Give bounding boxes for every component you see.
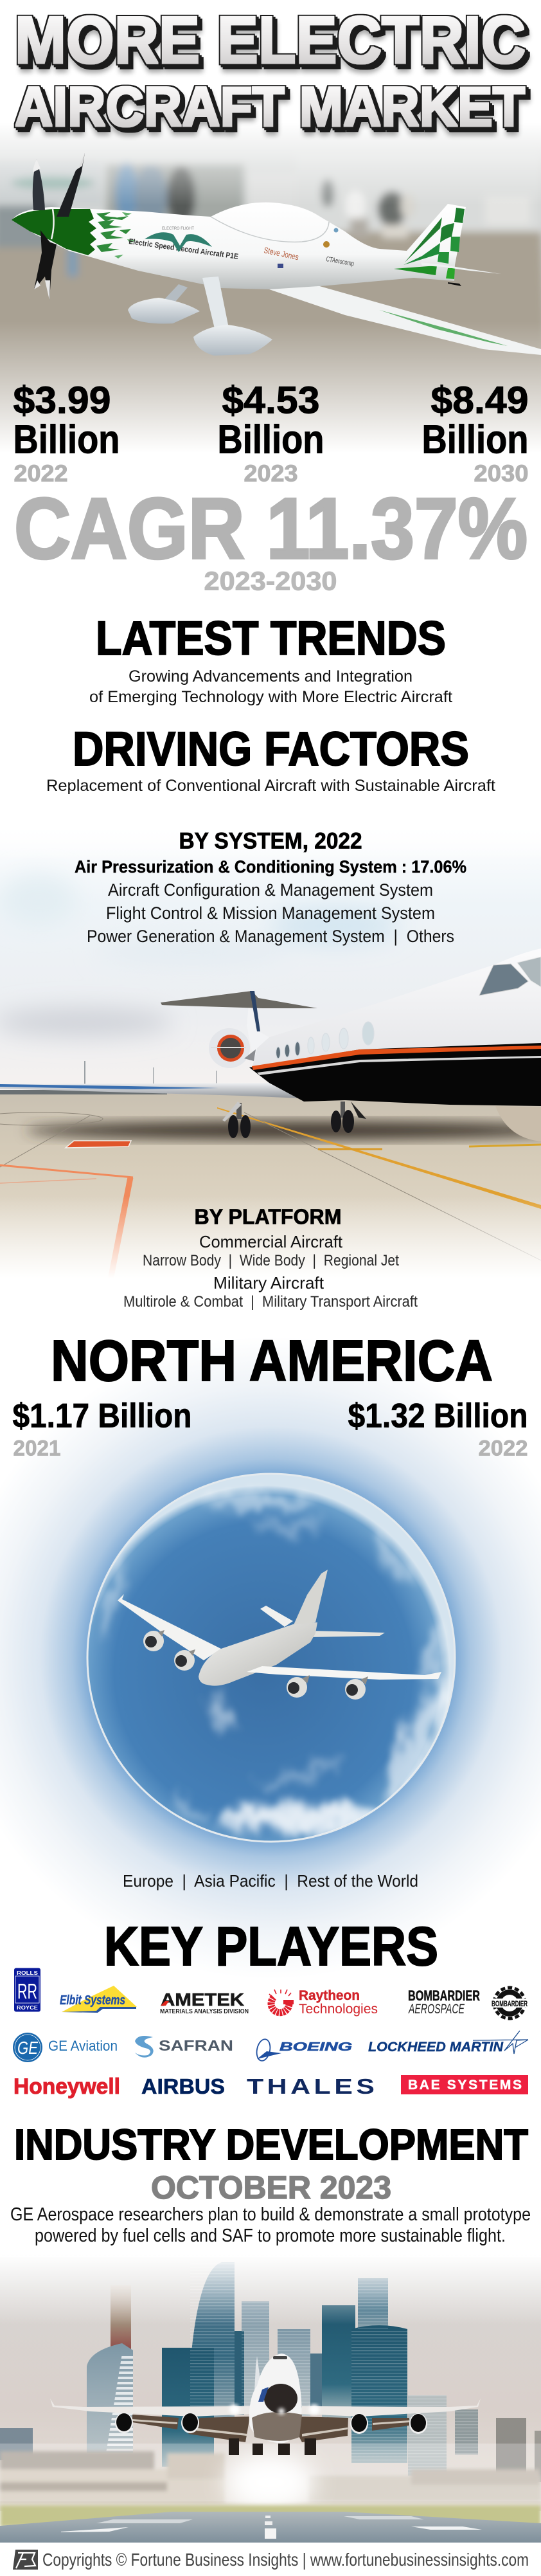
stat: 2030 market size: 2030 xyxy=(474,460,528,486)
upper wings xyxy=(50,2399,252,2417)
illustration: electric speed record aircraft xyxy=(12,153,541,356)
tail fin xyxy=(254,2356,260,2392)
stat: north america 2021: $1.17 Billion xyxy=(13,1397,191,1435)
apron crack lines xyxy=(0,1112,541,1260)
fuselage lettering: Steve Jones xyxy=(263,245,300,262)
stat: north america 2022: 2022 xyxy=(478,1437,528,1461)
airliner xyxy=(118,1570,441,1700)
fuselage lettering: CTAerocomp xyxy=(325,255,355,268)
logo: Boeing xyxy=(255,2038,352,2062)
text: driving factors description: Replacement of Conventional Aircraft with Sustainable Aircraft xyxy=(46,777,495,795)
text: system segments: Power Generation & Management System | Others xyxy=(87,927,454,946)
stat: north america 2022: $1.32 Billion xyxy=(348,1397,528,1435)
title: More Electric Aircraft Market: AIRCRAFT MARKET xyxy=(15,76,525,138)
stat: 2023 market size: Billion xyxy=(217,418,324,462)
bubble xyxy=(87,1474,455,1842)
text: system segments: Flight Control & Mission Management System xyxy=(106,903,435,923)
clouds inside bubble xyxy=(93,1496,455,1830)
heading: by system: BY SYSTEM, 2022 xyxy=(179,828,362,854)
logo: Boeing: BOEING xyxy=(279,2040,352,2053)
stat: north america 2021: 2021 xyxy=(13,1437,60,1461)
panel: business jet on apron photo xyxy=(0,823,541,1285)
logo: Bombardier Aerospace xyxy=(408,1988,480,2017)
jet landing gear xyxy=(222,1102,366,1138)
logo: Safran xyxy=(135,2036,233,2058)
blue halo xyxy=(0,1336,541,1979)
top fade xyxy=(0,2254,541,2325)
tail checker livery xyxy=(394,208,501,286)
logo: BAE Systems xyxy=(401,2075,528,2094)
runway xyxy=(0,2512,541,2543)
logo: Airbus: AIRBUS xyxy=(141,2074,225,2098)
lights xyxy=(229,2404,319,2415)
engines xyxy=(115,2413,427,2434)
logo: Rolls-Royce: ROLLS xyxy=(17,1970,39,1976)
logo: Raytheon Technologies xyxy=(269,1988,378,2017)
date: October 2023: OCTOBER 2023 xyxy=(151,2170,391,2206)
wing undersides xyxy=(132,2415,409,2442)
logo: Ametek: MATERIALS ANALYSIS DIVISION xyxy=(160,2008,249,2015)
fuselage lettering: ELECTRO FLIGHT xyxy=(162,227,194,231)
text: other regions: Europe | Asia Pacific | Rest of the World xyxy=(123,1871,418,1891)
logo: Raytheon Technologies: Raytheon xyxy=(299,1988,360,2003)
stat: 2023 market size: $4.53 xyxy=(222,379,320,422)
stat: 2022 market size xyxy=(13,379,120,486)
text: latest trends description: of Emerging Technology with More Electric Aircraft xyxy=(89,688,452,706)
logo: Rolls-Royce xyxy=(14,1968,40,2011)
logo: Elbit Systems xyxy=(60,1986,137,2013)
fade to white under scene xyxy=(0,322,541,453)
logo: Safran: SAFRAN xyxy=(159,2037,233,2054)
logo: Bombardier Aerospace: AEROSPACE xyxy=(408,2002,465,2017)
distant airport details xyxy=(84,1061,217,1091)
panel: sky bubble with airliner xyxy=(0,1336,541,1979)
fade to white xyxy=(0,1196,541,1278)
logo: GE Aviation xyxy=(13,2033,118,2062)
airliner taking off xyxy=(50,2354,481,2455)
stat: 2022 market size: 2022 xyxy=(14,460,68,486)
text: development description xyxy=(10,2204,531,2246)
cockpit canopy outline xyxy=(211,217,329,242)
low-rise city xyxy=(0,2451,541,2503)
heading: key players: KEY PLAYERS xyxy=(104,1916,438,1977)
fuselage lettering: Electric Speed Record Aircraft P1E xyxy=(129,237,239,261)
stat: 2030 market size: Billion xyxy=(421,418,528,462)
panel: hero photo background xyxy=(0,136,541,442)
text: system segments: Aircraft Configuration & Management System xyxy=(108,880,433,900)
logo: Rolls-Royce: ROYCE xyxy=(17,2005,39,2011)
logo: BAE Systems: BAE SYSTEMS xyxy=(408,2078,522,2092)
fuselage xyxy=(12,203,466,289)
heading: north america: NORTH AMERICA xyxy=(51,1329,493,1393)
wing xyxy=(207,270,541,355)
far wheel spat and strut xyxy=(128,284,200,323)
logo: Thales: THALES xyxy=(247,2075,375,2099)
logo: Ametek: AMETEK xyxy=(161,1990,244,2009)
text: platform segments: Commercial Aircraft xyxy=(199,1232,343,1251)
text: latest trends description: Growing Advancements and Integration xyxy=(129,667,412,685)
text: system segments: Air Pressurization & Conditioning System : 17.06% xyxy=(75,857,466,876)
propeller xyxy=(33,153,85,300)
near landing gear xyxy=(193,277,272,356)
apron ground xyxy=(0,1093,541,1280)
skyline towers xyxy=(0,2262,541,2485)
logo: Lockheed Martin xyxy=(368,2031,528,2054)
gear xyxy=(229,2438,316,2455)
green nose and zigzag xyxy=(12,209,136,259)
fog over top of scene xyxy=(0,122,541,206)
stat: north america 2022 xyxy=(348,1397,528,1461)
logo: Bombardier gear: BOMBARDIER xyxy=(492,2000,528,2008)
stat: 2030 market size: $8.49 xyxy=(430,379,528,422)
stat: 2022 market size: Billion xyxy=(13,418,120,462)
jet fuselage xyxy=(249,948,541,1141)
jet engine xyxy=(209,1028,256,1068)
logo: Bombardier Aerospace: BOMBARDIER xyxy=(408,1988,480,2004)
stat: 2023 market size: 2023 xyxy=(244,460,298,486)
heading: by platform: BY PLATFORM xyxy=(194,1205,342,1228)
red marking xyxy=(66,1141,131,1148)
stat: 2023 market size xyxy=(217,379,324,486)
CAGR period: 2023-2030 xyxy=(204,566,337,595)
logo: GE Aviation: GE xyxy=(17,2038,38,2058)
text: platform segments xyxy=(123,1232,418,1311)
stat: north america 2021 xyxy=(13,1397,191,1461)
jet T-tail xyxy=(161,991,317,1061)
logo: Elbit Systems: Elbit Systems xyxy=(60,1993,125,2008)
logo: GE Aviation: GE Aviation xyxy=(48,2038,118,2054)
engines xyxy=(143,1631,366,1700)
stat: 2030 market size xyxy=(421,379,528,486)
panel: airliner taking off over city skyline xyxy=(0,2254,541,2543)
logo: Ametek xyxy=(160,1990,249,2015)
logo: Bombardier gear xyxy=(491,1988,528,2018)
icon: Fortune Business Insights logo xyxy=(13,2550,38,2570)
stat: 2022 market size: $3.99 xyxy=(13,379,111,422)
jet cabin windows xyxy=(276,1022,374,1058)
text: platform segments: Narrow Body | Wide Body | Regional Jet xyxy=(143,1252,399,1269)
fuselage xyxy=(249,2354,301,2444)
landing light glow xyxy=(225,2453,315,2511)
heading: driving factors: DRIVING FACTORS xyxy=(73,722,469,776)
orange taxi lines xyxy=(0,1165,133,1280)
logo: Lockheed Martin: LOCKHEED MARTIN xyxy=(368,2040,504,2054)
grass xyxy=(0,2505,541,2527)
text: latest trends description xyxy=(89,667,452,706)
logo: Honeywell: Honeywell xyxy=(13,2074,120,2099)
jet wing xyxy=(0,1083,302,1098)
fuselage lettering xyxy=(129,227,355,268)
text: platform segments: Military Aircraft xyxy=(213,1273,324,1293)
logo: Raytheon Technologies: Technologies xyxy=(299,2002,378,2017)
runway yellow line xyxy=(217,1107,541,1209)
ground shadow xyxy=(26,1121,541,1139)
heading: latest trends: LATEST TRENDS xyxy=(96,612,446,665)
logo: Rolls-Royce: RR xyxy=(17,1979,37,2003)
text: platform segments: Multirole & Combat | Military Transport Aircraft xyxy=(123,1293,418,1311)
title: More Electric Aircraft Market xyxy=(15,3,526,138)
ground haze xyxy=(0,2444,541,2501)
text: system segments xyxy=(75,857,466,946)
